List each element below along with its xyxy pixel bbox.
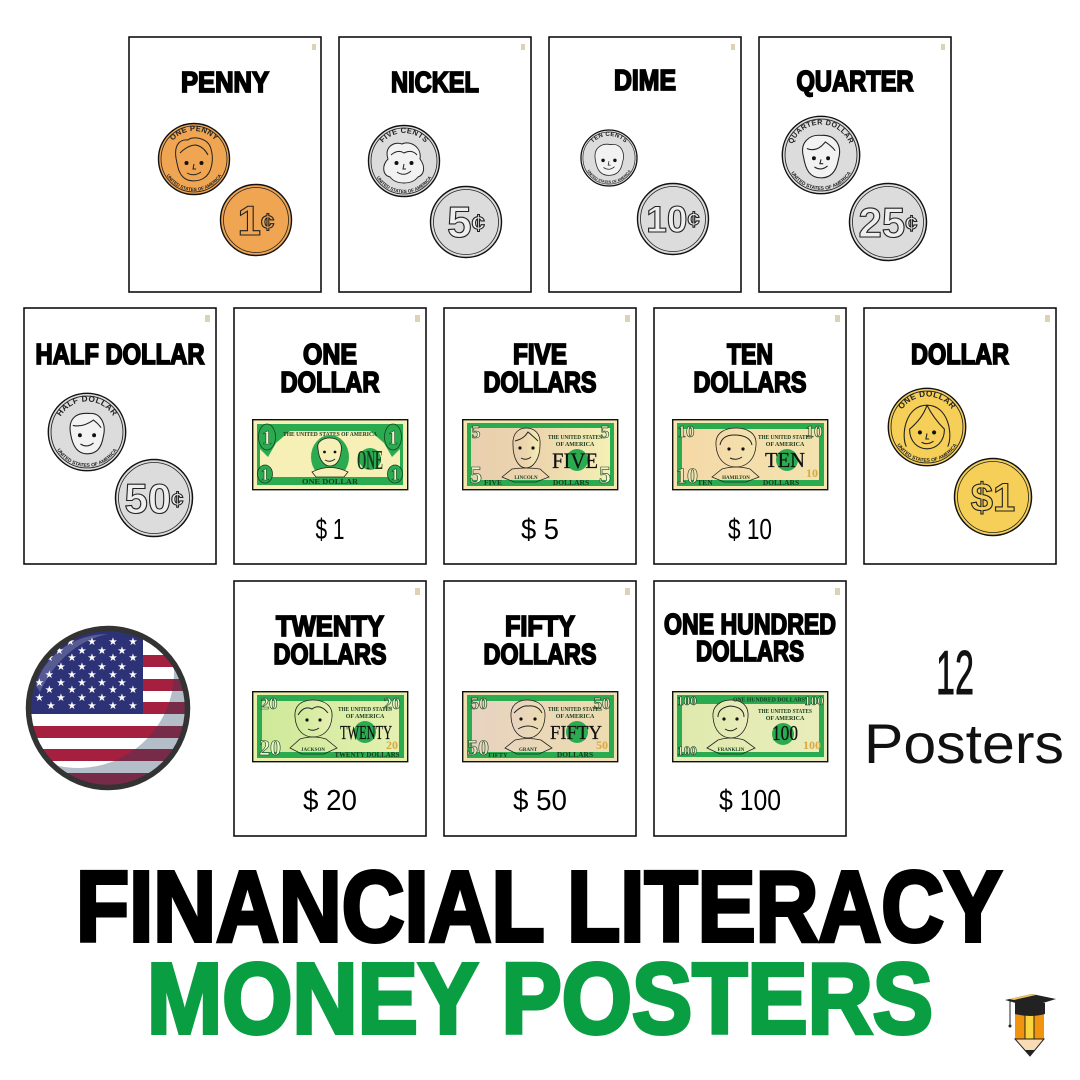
banknote: fifty dollars: FIFTY [488, 752, 508, 759]
poster: twenty dollars: DOLLARS [274, 639, 386, 671]
banknote: one dollar [253, 420, 408, 490]
banknote: fifty dollars [463, 692, 618, 762]
poster: one dollar: DOLLAR [280, 367, 380, 399]
coin: quarter front [782, 116, 860, 194]
coin: dollar back [954, 458, 1032, 536]
flag badge: ★★★★★ [45, 684, 138, 696]
flag badge: ★★★★★ [46, 700, 138, 712]
banknote: five dollars: FIVE [484, 478, 502, 487]
banknote: twenty dollars: 20 [384, 694, 400, 713]
coin: penny front: ONE PENNY [170, 126, 218, 140]
poster: five dollars [444, 308, 636, 564]
value: $20: $ 20 [303, 785, 357, 817]
heading: dollar: DOLLAR [911, 339, 1009, 371]
coin: nickel back [430, 186, 502, 258]
coin: nickel front [368, 124, 440, 198]
banknote: twenty dollars: 20 [259, 735, 281, 760]
banknote: one hundred dollars: 100 [772, 721, 798, 745]
banknote: one dollar: 1 [388, 427, 398, 449]
banknote: twenty dollars: 20 [386, 738, 398, 752]
coin: quarter back: ¢ [905, 211, 917, 236]
flag badge: ★★★★★ [35, 661, 127, 673]
poster: quarter [758, 36, 952, 293]
coin: dime back [638, 184, 708, 254]
flag badge outline [28, 628, 188, 788]
coin: nickel front: FIVE CENTS [379, 128, 428, 142]
banknote: ten dollars: 10 [678, 422, 694, 441]
poster: one dollar [234, 308, 426, 564]
value: $50: $ 50 [513, 785, 567, 817]
coin: quarter back [850, 184, 926, 260]
coin: penny front [158, 122, 230, 196]
poster: one hundred dollars: DOLLARS [696, 636, 804, 668]
banknote: fifty dollars: GRANT [519, 748, 538, 753]
poster: dime [548, 36, 742, 293]
banknote: twenty dollars [253, 692, 408, 762]
banknote: fifty dollars: 50 [467, 735, 489, 760]
coin: nickel front: UNITED STATES OF AMERICA [377, 176, 432, 193]
coin: dollar front [888, 388, 966, 466]
banknote: one hundred dollars: 100 [804, 693, 824, 708]
banknote: five dollars: FIVE [552, 448, 598, 473]
coin: dime front [580, 129, 638, 187]
banknote: five dollars: 5 [470, 463, 482, 489]
coin: dime front: TEN CENTS [590, 132, 628, 142]
coin: nickel back: 5 [447, 198, 472, 247]
heading: penny: PENNY [181, 67, 269, 99]
banknote: one hundred dollars: FRANKLIN [718, 748, 745, 753]
banknote: fifty dollars: 50 [594, 694, 610, 713]
flag badge [31, 631, 185, 785]
banknote: one dollar: ONE DOLLAR [302, 477, 359, 486]
banknote: fifty dollars: DOLLARS [557, 750, 593, 759]
banknote: one hundred dollars: 100 [677, 693, 697, 708]
poster: twenty dollars [234, 581, 426, 836]
coin: half dollar front: HALF DOLLAR [56, 396, 117, 416]
heading: five dollars: FIVE [513, 339, 567, 371]
value: $5: $ 5 [521, 514, 559, 546]
banknote: five dollars: LINCOLN [514, 476, 538, 481]
banknote: ten dollars: 10 [806, 466, 818, 480]
banknote: twenty dollars: TWENTY [340, 722, 392, 744]
banknote: five dollars: 5 [600, 422, 610, 442]
coin: dime back: 10 [646, 199, 687, 240]
banknote: fifty dollars: OF AMERICA [556, 714, 595, 720]
coin: half dollar back [116, 460, 192, 536]
coin: penny back: ¢ [261, 209, 274, 236]
banknote: one dollar: 1 [262, 427, 272, 449]
flag badge: ★★★★★ [45, 652, 138, 664]
poster: nickel [338, 36, 532, 293]
value: $10: $ 10 [728, 514, 772, 546]
coin: quarter front: QUARTER DOLLAR [788, 120, 854, 144]
banknote: one dollar: THE UNITED STATES OF AMERICA [283, 431, 377, 438]
banknote: twenty dollars: JACKSON [301, 748, 325, 753]
heading: twenty dollars: TWENTY [276, 611, 384, 643]
coin: dime front: UNITED STATES OF AMERICA [588, 170, 631, 184]
coin: penny front: UNITED STATES OF AMERICA [167, 174, 222, 191]
heading: one dollar: ONE [303, 339, 357, 371]
banknote: five dollars: 5 [472, 422, 480, 442]
poster: half dollar [23, 307, 217, 565]
banknote: five dollars: OF AMERICA [556, 442, 595, 448]
coin: half dollar front: UNITED STATES OF AMERICA [58, 448, 117, 467]
heading: dime: DIME [614, 65, 676, 97]
banknote: one hundred dollars: OF AMERICA [766, 716, 805, 722]
value: $100: $ 100 [719, 785, 781, 817]
banknote: one dollar: ONE [357, 445, 383, 475]
banknote: fifty dollars: 50 [470, 694, 488, 713]
label: 12 posters [864, 639, 1064, 775]
poster: one hundred dollars [654, 581, 846, 836]
heading: nickel: NICKEL [391, 67, 479, 99]
coin: half dollar back: ¢ [171, 487, 183, 512]
banknote: one dollar: 1 [391, 465, 399, 484]
coin: penny back [220, 184, 292, 256]
banknote: one hundred dollars: THE UNITED STATES [758, 709, 813, 715]
banknote: ten dollars: OF AMERICA [766, 442, 805, 448]
heading: ten dollars: TEN [727, 339, 773, 371]
coin: dollar back: $1 [971, 476, 1015, 520]
banknote: one hundred dollars [673, 692, 828, 762]
banknote: fifty dollars: 50 [596, 738, 608, 752]
banknote: one dollar: 1 [261, 465, 269, 484]
coin: quarter back: 25 [859, 199, 905, 246]
banknote: ten dollars [673, 420, 828, 490]
banknote: five dollars [463, 420, 618, 490]
banknote: one hundred dollars: 100 [677, 743, 697, 758]
heading: fifty dollars: FIFTY [505, 611, 575, 643]
coin: quarter front: UNITED STATES OF AMERICA [792, 171, 851, 190]
poster: penny [128, 36, 322, 293]
poster: ten dollars [654, 308, 846, 564]
icon: pencil with graduation cap [1005, 994, 1056, 1056]
poster: fifty dollars [444, 581, 636, 836]
flag badge: ★★★★ [66, 636, 138, 648]
heading: one hundred dollars: ONE HUNDRED [664, 609, 836, 641]
banknote: twenty dollars: THE UNITED STATES [338, 707, 393, 713]
coin: half dollar back: 50 [125, 475, 171, 522]
coin: dime back: ¢ [687, 207, 700, 232]
coin: dollar front: ONE DOLLAR [898, 390, 956, 409]
flag badge: ★★★★★ [35, 677, 127, 689]
flag badge: ★★★★ [55, 645, 127, 657]
banknote: five dollars: DOLLARS [553, 478, 589, 487]
coin: nickel back: ¢ [472, 210, 485, 237]
banknote: twenty dollars: 20 [260, 694, 278, 713]
banknote: ten dollars: TEN [765, 448, 805, 472]
banknote: one hundred dollars: ONE HUNDRED DOLLARS [733, 696, 805, 704]
label: 12 posters: 12 [936, 639, 974, 708]
poster: five dollars: DOLLARS [484, 367, 596, 399]
banknote: ten dollars: THE UNITED STATES [758, 435, 813, 441]
poster: ten dollars: DOLLARS [694, 367, 806, 399]
flag badge: ★★★★★ [45, 669, 138, 681]
flag badge: ★★★★★ [35, 692, 127, 704]
banknote: ten dollars: DOLLARS [763, 478, 799, 487]
banknote: ten dollars: TEN [697, 478, 713, 487]
coin: dollar front: UNITED STATES OF AMERICA [898, 443, 957, 462]
heading: quarter: QUARTER [796, 66, 914, 98]
banknote: five dollars: 5 [599, 463, 611, 489]
title: money posters: MONEY POSTERS [147, 943, 933, 1055]
poster: dollar coin [863, 307, 1057, 565]
banknote: fifty dollars: FIFTY [550, 722, 602, 744]
coin: penny back: 1 [238, 197, 261, 244]
label: 12 posters: Posters [864, 712, 1064, 775]
banknote: ten dollars: HAMILTON [722, 476, 750, 481]
banknote: ten dollars: 10 [806, 422, 822, 441]
coin: half dollar front [48, 392, 126, 472]
banknote: twenty dollars: TWENTY DOLLARS [334, 750, 400, 759]
poster: fifty dollars: DOLLARS [484, 639, 596, 671]
heading: half dollar: HALF DOLLAR [36, 339, 205, 371]
banknote: ten dollars: 10 [676, 463, 698, 488]
banknote: five dollars: THE UNITED STATES [548, 435, 603, 441]
banknote: twenty dollars: OF AMERICA [346, 714, 385, 720]
banknote: fifty dollars: THE UNITED STATES [548, 707, 603, 713]
banknote: one hundred dollars: 100 [803, 738, 821, 752]
value: $1: $ 1 [316, 514, 344, 546]
